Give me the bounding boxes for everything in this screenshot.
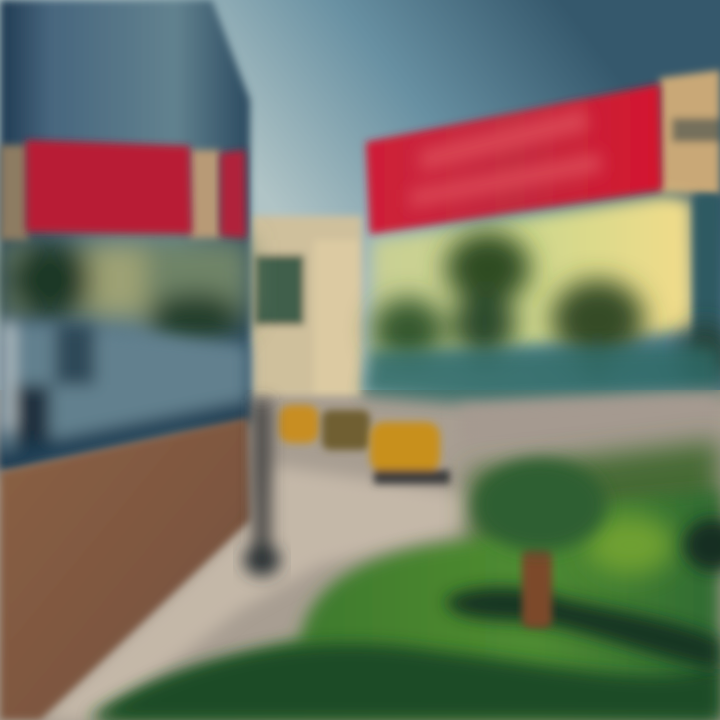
lit lawn patch <box>586 515 674 575</box>
red banner left <box>26 140 192 234</box>
red banner right <box>366 84 662 234</box>
yellow vehicle left <box>279 405 319 443</box>
yellow vehicle right <box>370 422 450 484</box>
background shrubs <box>470 440 720 560</box>
right glass tower <box>694 195 720 365</box>
tree canopy <box>474 459 606 551</box>
yellow lit facade <box>372 195 694 360</box>
centre cream building <box>250 216 362 396</box>
left building glass <box>0 0 250 470</box>
sky <box>0 0 720 400</box>
lawn <box>90 490 720 720</box>
left building reflection of trees <box>0 240 250 344</box>
red banner left narrow <box>220 150 246 238</box>
banner lettering smear <box>410 108 602 208</box>
front dark lawn <box>90 644 720 720</box>
teal lower storefront <box>362 345 720 405</box>
far pavement <box>460 392 720 445</box>
dark vehicle middle <box>322 410 370 450</box>
palm trees <box>372 232 720 385</box>
right building top <box>660 70 720 195</box>
right dark shrub <box>684 519 720 571</box>
left building lower windows <box>0 320 248 472</box>
lamp post <box>244 400 280 576</box>
brick wall <box>0 418 250 720</box>
near pavement <box>40 465 470 720</box>
curved hedge <box>445 587 720 670</box>
tan band beside left banner <box>0 145 220 240</box>
tree trunk <box>522 548 552 628</box>
ground base <box>0 390 720 720</box>
